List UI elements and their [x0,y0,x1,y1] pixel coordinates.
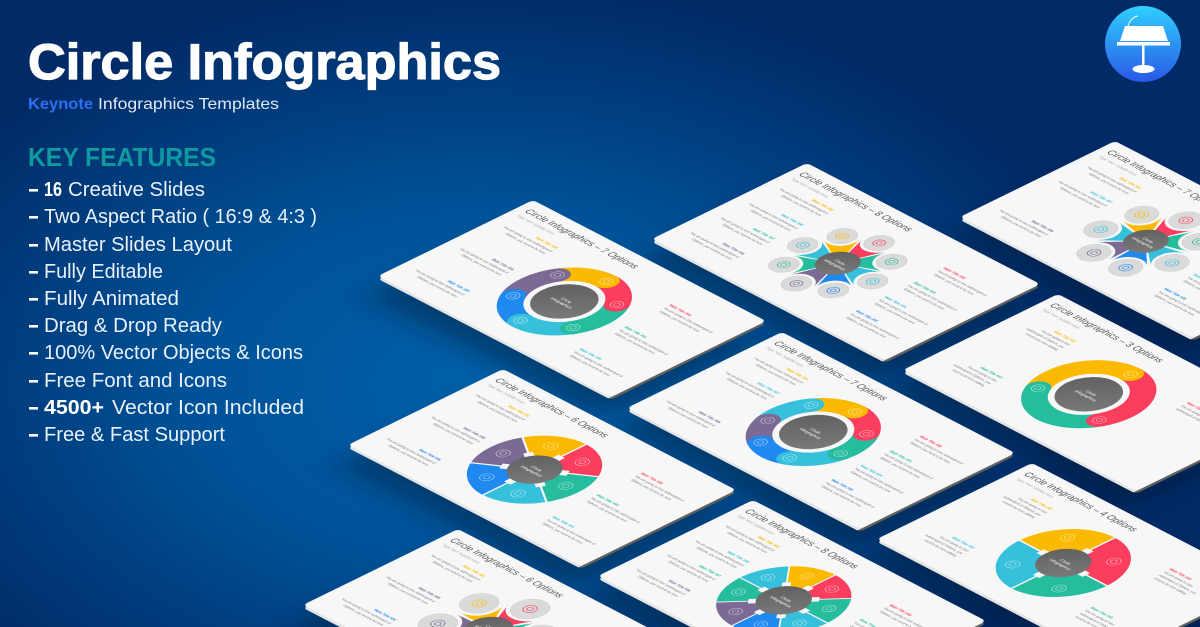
text block 06: Options, you need to be here [431,422,474,445]
text block 03: Options, you need to be here [902,288,945,310]
text block 02: Main Title #02 [639,472,666,485]
text block 03: Options, you need to be here [504,232,547,255]
heading: key features: KEY FEATURES [28,142,216,172]
text block 06: You are going to lose submerged of [458,247,511,275]
donut chart: Circle [559,297,574,304]
text block 02: Options, you need to be here [780,194,823,217]
text block 03 right: You are going to lose submerged of [617,329,670,356]
text block 01: Options, you need to be here [1087,173,1130,195]
feature: support: Free & Fast Support [44,424,225,446]
text block 02 [1151,567,1200,597]
title: Circle Infographics [28,34,501,90]
donut chart: Infographics [1073,389,1099,402]
panel: slide 6 options flower [278,529,706,627]
text block 06 [379,573,444,606]
slide card [303,529,691,627]
text block 04: need to be here adding [923,539,958,557]
text block 04: Main Title #04 [859,464,885,478]
text block 03: You are going to lose submerged of [906,284,959,312]
text block 03 [877,450,942,483]
feature: master slides: Master Slides Layout [44,234,232,256]
pie chart [685,550,883,627]
panel: slide 6 options pie [323,369,751,586]
text block 06: You are going to lose submerged of [665,400,717,427]
slide subtitle: Type Your Subtitle Here [1040,308,1082,330]
text block 06 [424,413,489,446]
text block 01: You are going to lose [1016,497,1049,514]
text block 05: Main Title #05 [830,478,856,492]
text block 06: You are going to lose submerged of [689,232,741,259]
text block 03 [901,281,966,314]
text block 03: Main Title #03 [888,450,915,463]
text block 05: Main Title #05 [854,309,881,323]
text block 05: Main Title #05 [372,608,399,622]
text block 04 [847,464,912,497]
text block 03 right: Main Title #03 [623,325,649,339]
pie chart: Infographics [1048,558,1073,571]
text block 02: Main Title #02 [668,304,694,317]
text block 06: Main Title #06 [462,426,488,440]
donut chart: Infographics [549,297,574,310]
panel: slide 8 options pie [573,500,1001,627]
pie chart [441,423,628,517]
text block 02 right [931,266,996,300]
text block 05: Options, you need to be here [415,276,459,298]
pie chart: Circle [779,596,793,603]
text block 01: Main Title #01 [756,535,782,549]
text block 08: You are going to lose submerged of [747,203,800,230]
text block 02: Main Title #02 [888,603,914,617]
text block 01: Main Title #01 [506,404,533,418]
flower chart [383,576,594,627]
text block 01: submerged of Options, you [1002,495,1042,516]
text block 03 [496,223,561,256]
text block 03: You are going to lose [966,366,999,382]
text block 04: Main Title #04 [951,536,977,550]
text block 02 right: You are going to lose submerged of [936,270,989,297]
text block 05 [408,266,473,299]
slide subtitle: Type Your Subtitle Here [764,346,806,368]
text block 04 [918,528,977,558]
text block 03 [584,493,649,527]
text block 04: Options, you need to be here [541,522,584,544]
text block 03: submerged of Options, you [952,364,992,385]
text block 03: Main Title #03 [1089,606,1116,620]
text block 05 [818,478,883,511]
panel: slide 7 options donut [353,200,781,417]
feature: drag and drop: Drag & Drop Ready [44,315,222,337]
text block 02: need to be here adding [1152,577,1188,595]
text block 05: Main Title #05 [446,279,472,293]
feature: 16 creative slides: 16 [44,179,62,201]
text block 05: You are going to lose submerged of [385,438,438,465]
text block 02 [907,435,972,468]
text block 03 right [612,325,677,359]
slide card [652,163,1040,360]
text block 05 [335,594,400,627]
text block 01: Main Title #01 [1052,330,1079,344]
text block 08 [688,537,753,570]
text block 07: Options, you need to be here [725,378,768,400]
text block 01: Main Title #01 [785,367,811,381]
donut chart: Circle [808,427,823,435]
slide subtitle: Type Your Subtitle Here [440,543,482,565]
text block 03: You are going to lose submerged of [882,453,935,480]
text block 04: Options, you need to be here [568,354,611,377]
text block 05: You are going to lose submerged of [848,313,901,340]
text block 01: need to be here adding [1024,333,1059,351]
text block 01 [747,354,812,387]
text block 06: Main Title #06 [1030,220,1056,233]
text block 03 right: Options, you need to be here [613,332,656,355]
flower chart: Infographics [1130,236,1156,249]
text block 07 [713,213,778,247]
donut chart [981,340,1197,449]
text block 08: Main Title #08 [780,213,806,227]
text block 05 [380,434,445,468]
text block 06: You are going to lose submerged of [635,569,687,596]
text block 03 [847,618,912,627]
text block 06: Main Title #06 [667,579,693,593]
pie chart [964,513,1162,613]
text block 01 [424,551,489,584]
text block 01: Main Title #01 [461,564,488,578]
feature list [29,179,317,446]
slide subtitle: Type Your Subtitle Here [789,177,831,199]
text block 04 [1180,273,1200,306]
text block 07 [718,368,783,401]
text block 04: Options, you need to be here [873,302,916,324]
donut chart: Infographics [798,427,823,440]
text block 03: need to be here adding [951,369,986,387]
text block 02 [628,472,693,505]
text block 03: Main Title #03 [595,493,621,507]
text block 04: Main Title #04 [883,295,909,309]
text block 02: Options, you need to be here [658,310,701,333]
feature: 4500+ icons [44,397,304,419]
subtitle: Infographics Templates [98,96,279,113]
slide subtitle: Type Your Subtitle Here [1097,155,1139,177]
text block 07: Main Title #07 [756,382,781,395]
text block 01: You are going to lose submerged of [752,357,805,384]
flower chart: Circle [833,259,847,266]
text block 03: Main Title #03 [534,236,561,250]
slide title: Circle Infographics – 4 Options [1020,471,1141,533]
text block 07: Main Title #07 [1089,191,1114,204]
text block 03: You are going to lose [1083,609,1116,626]
text block 04: submerged of Options, you [924,534,964,555]
text block 06: Main Title #06 [721,242,747,256]
text block 01 [718,522,783,555]
text block 05: Options, you need to be here [844,316,888,338]
text block 02 [877,603,942,627]
text block 02 [772,185,837,218]
text block 06: You are going to lose submerged of [385,576,437,603]
pie chart: Circle [530,465,544,472]
text block 01: need to be here adding [1001,501,1036,519]
text block 04 [567,347,632,381]
text block 05: Options, you need to be here [1153,294,1196,316]
text block 07: You are going to lose submerged of [665,554,718,581]
text block 01: Options, you need to be here [476,401,519,423]
panel: slide 7 options top right [935,141,1200,358]
text block 08: Main Title #08 [726,550,752,564]
feature: fully animated: Fully Animated [44,288,179,310]
text block 02: Main Title #02 [810,198,836,212]
pie chart: Infographics [519,465,544,478]
text block 06: Main Title #06 [417,586,443,600]
slide card [378,200,766,397]
text block 05: You are going to lose submerged of [824,482,876,509]
text block 08: You are going to lose submerged of [693,540,746,567]
slide title: Circle Infographics – 8 Options [741,508,862,570]
text block 07: Options, you need to be here [667,560,710,583]
text block 04 [539,515,604,548]
text block 01: You are going to lose [1039,330,1072,346]
text block 07: You are going to lose submerged of [1057,180,1109,208]
flower chart [740,214,936,313]
text block 01: Main Title #01 [1118,176,1144,190]
text block 02 right: Options, you need to be here [932,273,975,296]
text block 04: You are going to lose submerged of [572,351,625,378]
text block 04: Options, you need to be here [849,471,892,493]
panel: slide 8 options flower [627,163,1055,380]
flower chart: Infographics [822,258,848,271]
slide card [348,369,736,566]
text block 08: Options, you need to be here [749,209,792,232]
text block 01: Options, you need to be here [754,364,797,386]
text block 02: You are going to lose submerged of [912,438,965,465]
slide title: Circle Infographics – 3 Options [1046,302,1167,364]
subtitle [28,96,279,113]
text block 01: You are going to lose submerged of [474,394,527,421]
text block 03 [946,358,1005,388]
text block 03: Main Title #03 [979,366,1005,379]
text block 06: Main Title #06 [697,411,723,424]
slide title: Circle Infographics – 8 Options [795,171,916,233]
slide card [960,141,1200,338]
text block 02: You are going to lose submerged of [662,307,715,334]
slide title: Circle Infographics – 7 Options [521,208,642,270]
text block 05: Options, you need to be here [342,604,385,626]
slide subtitle: Type Your Subtitle Here [1014,477,1056,499]
text block 01 [1020,322,1079,352]
text block 03: Options, you need to be here [878,456,921,479]
text block 04: You are going to lose submerged of [545,519,597,546]
donut chart [458,248,671,355]
text block 06: Options, you need to be here [690,238,734,260]
text block 07 [1051,177,1116,210]
slide card [903,294,1200,491]
text block 02: You are going to lose submerged of [633,475,686,502]
feature: fully editable: Fully Editable [44,261,163,283]
text block 05: Main Title #05 [417,448,444,462]
text block 06 [659,397,724,430]
text block 05: You are going to lose submerged of [414,269,466,296]
flower chart [1042,190,1200,293]
text block 02 right: Main Title #02 [942,266,968,280]
subtitle: Keynote [28,96,93,113]
text block 02: submerged of Options, you [1157,574,1198,595]
text block 01: You are going to lose submerged of [429,554,482,581]
text block 07 [659,550,724,584]
icon: keynote logo [1105,6,1181,82]
text block 06: Options, you need to be here [460,254,503,276]
text block 01 [996,489,1055,519]
feature: 4500+ icons: Vector Icon Included [112,397,304,419]
text block 02: Main Title #02 [1168,567,1194,581]
text block 01: Options, you need to be here [726,531,769,554]
text block 08 [742,200,807,233]
text block 05: You are going to lose submerged of [340,598,393,625]
text block 01 [1080,163,1145,196]
slide card [598,500,986,627]
text block 07: Options, you need to be here [1058,187,1101,209]
text block 06: Options, you need to be here [386,582,429,605]
text block 02: Options, you need to be here [908,442,952,464]
text block 05: Main Title #05 [1163,287,1189,301]
donut chart [706,378,921,486]
text block 07: Main Title #07 [697,564,723,577]
feature: 4500+ icons: 4500+ [44,397,104,419]
text block 06 [683,228,748,262]
text block 06: Options, you need to be here [999,216,1043,238]
feature: free font: Free Font and Icons [44,370,227,392]
text block 05 [843,309,908,343]
text block 06: Options, you need to be here [636,575,680,597]
text block 06 [453,244,517,277]
feature: vector objects: 100% Vector Objects & Icons [44,342,303,364]
panel: slide 4 options pie [852,463,1200,627]
text block 01: You are going to lose submerged of [724,525,776,552]
text block 04: Main Title #04 [551,515,577,529]
text block 06: Options, you need to be here [666,407,710,429]
pie chart: Circle [1058,558,1073,566]
text block 01: Options, you need to be here [431,561,474,583]
text block 03: Main Title #03 [912,281,938,295]
text block 04: You are going to lose submerged of [853,467,906,495]
text block 06 [629,565,694,599]
text block 06: You are going to lose submerged of [998,209,1050,236]
text block 02: Options, you need to be here [629,479,673,501]
text block 03: Options, you need to be here [585,500,628,523]
slide title: Circle Infographics – 7 Options [770,340,891,402]
text block 01: You are going to lose submerged of [1085,166,1138,193]
text block 03: You are going to lose submerged of [502,226,555,253]
text block 02 [656,304,721,337]
text block 04: You are going to lose [938,536,970,552]
text block 07: You are going to lose submerged of [724,371,776,399]
donut chart: Circle [1084,390,1098,397]
text block 06 [992,206,1057,239]
text block 04: Main Title #04 [578,347,604,361]
text block 07: Main Title #07 [751,227,777,240]
text block 07: Options, you need to be here [721,223,764,246]
text block 07: You are going to lose submerged of [719,217,772,244]
panel: slide 7 options center donut [602,332,1030,549]
slide title: Circle Infographics – 6 Options [491,377,612,439]
text block 05: Options, you need to be here [820,485,863,507]
feature: 16 creative slides: Creative Slides [68,179,205,201]
text block 01: Main Title #01 [1029,498,1055,511]
text block 03: You are going to lose submerged of [589,497,642,524]
text block 06: Main Title #06 [490,258,517,271]
text block 04 [872,295,936,329]
slide title: Circle Infographics – 6 Options [446,537,567,599]
text block 01 [469,391,534,424]
slide subtitle: Type Your Subtitle Here [485,383,527,405]
pie chart: Infographics [768,595,794,608]
text block 01: submerged of Options, you [1025,328,1066,349]
flower chart: Circle [1141,237,1155,244]
slide subtitle: Type Your Subtitle Here [735,514,777,536]
panel: slide 3 options donut [878,294,1200,511]
slide card [877,463,1200,627]
text block 06: You are going to lose submerged of [430,416,482,443]
text block 08: Options, you need to be here [695,546,738,569]
text block 03 [1072,606,1131,627]
text block 02: Main Title #02 [918,435,945,448]
text block 04: You are going to lose submerged of [877,299,930,326]
feature: aspect ratio: Two Aspect Ratio ( 16:9 & 4:3 ) [44,206,317,228]
text block 02: You are going to lose [1162,571,1194,587]
text block 05: Options, you need to be here [387,444,430,466]
text block 02: You are going to lose submerged of [778,188,830,215]
slide card [627,332,1015,529]
slide subtitle: Type Your Subtitle Here [515,214,557,236]
